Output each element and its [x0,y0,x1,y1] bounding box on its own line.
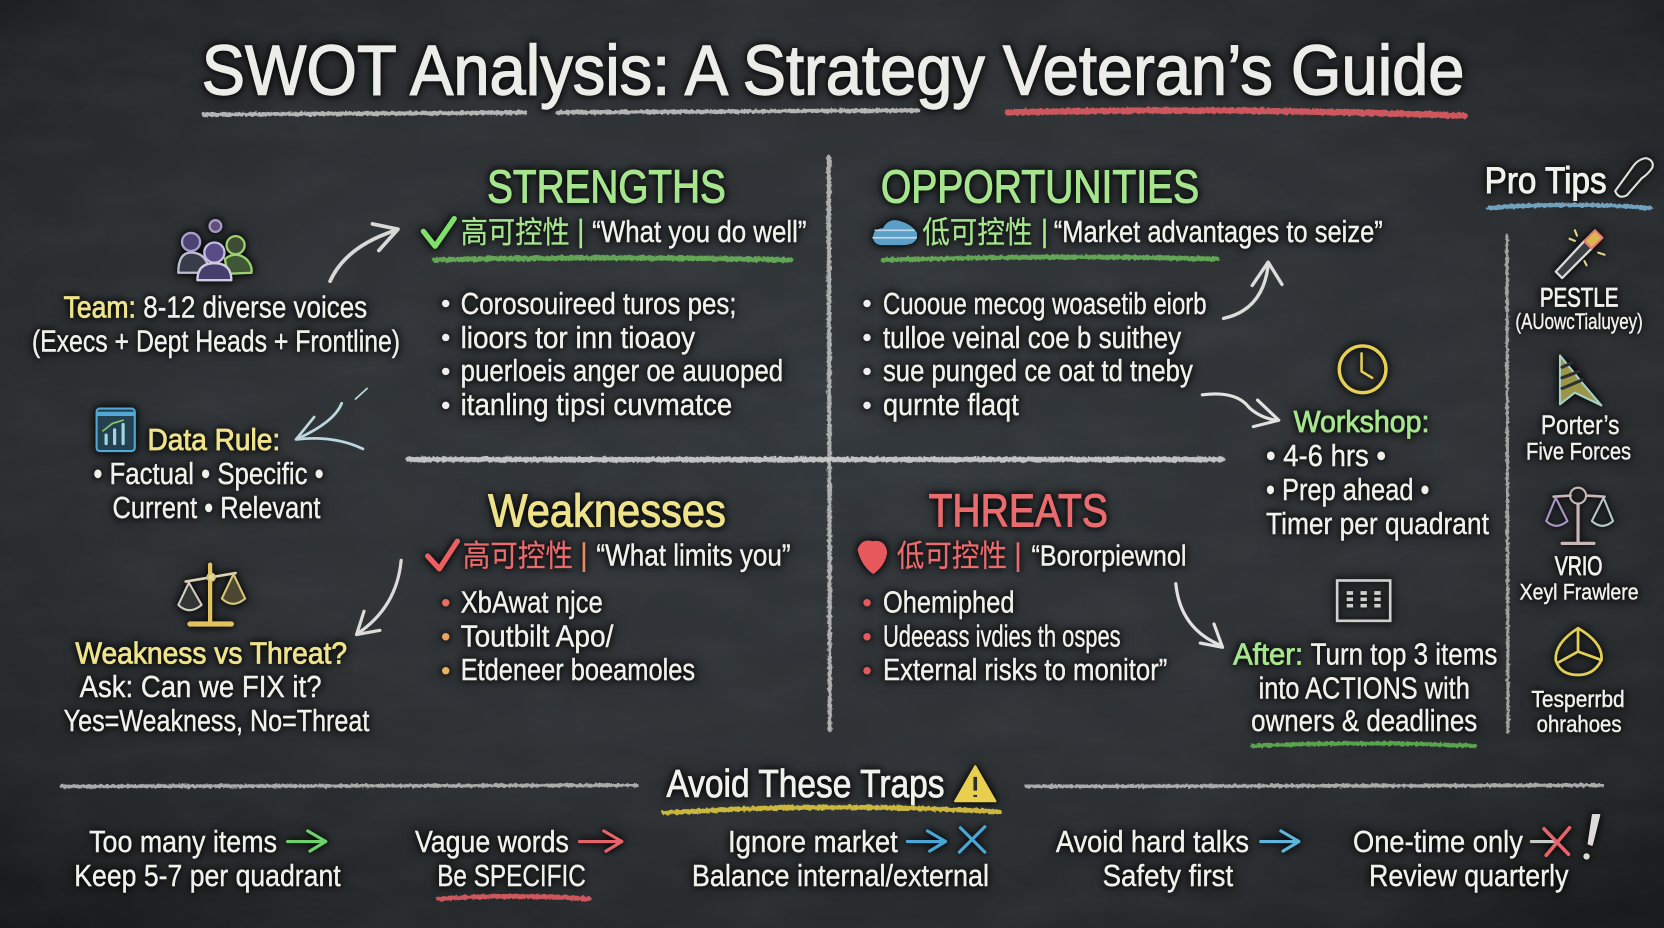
item: pestle [1515,230,1643,334]
bullets: Ohemiphed [883,584,1015,619]
panel: after: Turn top 3 items [1311,636,1497,671]
bullets: lioors tor inn tioaoy [461,320,696,355]
item: vrio: VRIO [1555,551,1602,581]
quote: “Market advantages to seize” [1054,214,1383,249]
item: fourth framework [1531,628,1625,737]
icon: planner grid [1337,580,1390,621]
heading: pro tips: Pro Tips [1485,159,1607,201]
bullets [442,286,783,422]
heading: avoid these traps: Avoid These Traps [666,762,944,806]
control label: 低可控性 [922,215,1033,250]
icon: red blob [857,541,887,574]
item: pestle: PESTLE [1540,283,1618,313]
trap 3: Ignore market [728,824,898,859]
panel: after: into ACTIONS with [1259,670,1470,705]
bullets: puerloeis anger oe auuoped [461,353,783,388]
bullets: Udeeass ivdies th ospes [883,618,1121,653]
bullets: qurnte flaqt [883,387,1019,422]
panel: workshop [1266,346,1489,541]
pro tips underline [1488,205,1650,208]
trap 2: Be SPECIFIC [437,858,586,893]
panel: threats [857,484,1186,687]
panel: team: 8-12 diverse voices [143,289,367,324]
heading: opportunities: OPPORTUNITIES [881,161,1199,213]
quote: “Bororpiewnol [1032,541,1186,573]
after underline [1252,743,1475,746]
panel: data rule [93,409,324,525]
heading: weaknesses: Weaknesses [488,484,726,536]
panel: weakness vs threat [64,565,370,738]
arrow: opportunities up [1224,262,1282,318]
quadrant divider lines [409,157,1223,730]
weakness vs threat text: Ask: Can we FIX it? [80,669,322,704]
trap 1: Too many items [89,824,277,859]
panel: workshop: • Prep ahead • [1266,472,1429,507]
panel: workshop: Timer per quadrant [1266,506,1489,541]
bullets: Toutbilt Apo/ [461,618,614,653]
trap 2 [415,824,622,893]
arrow: to data rule [296,388,367,449]
opportunities underline [883,257,1217,260]
trap 4: Avoid hard talks [1056,824,1249,859]
icon: data chart [97,409,135,451]
item: vrio: Xeyl Frawlere [1520,580,1639,605]
trap 4 [1056,824,1299,893]
trap 2: Vague words [415,824,569,859]
heading: data rule: Data Rule: [148,422,280,457]
bullets [863,584,1167,687]
trap 1: Keep 5-7 per quadrant [74,858,341,893]
control label: 高可控性 [463,539,573,574]
arrow: team to strengths [330,224,398,281]
panel: after: owners & deadlines [1251,703,1477,738]
bullets: Etdeneer boeamoles [461,652,695,687]
heading: threats: THREATS [929,484,1108,536]
trap 5: Review quarterly [1369,858,1569,893]
arrow: to after [1176,584,1223,647]
panel: avoid these traps [74,762,1599,893]
panel: weakness vs threat: Yes=Weakness, No=Threat [64,703,370,738]
trap 5 [1353,815,1599,893]
icon: chalk stick [1615,158,1653,197]
quote: “What you do well” [592,214,807,249]
trap 5: One-time only [1353,824,1523,859]
title underline [204,110,1464,116]
title: SWOT Analysis: A Strategy Veteran’s Guide [202,31,1464,109]
icon: green check [423,219,454,246]
icon: scales [178,565,245,624]
panel: strengths [423,161,807,422]
control label: 低可控性 [897,539,1007,574]
item: porter's five forces: Porter’s [1541,410,1619,440]
separator [583,542,585,572]
icon: cloud [872,220,917,245]
icon: team [178,220,252,280]
quote: “What limits you” [596,538,791,573]
pro tips divider [1507,236,1508,732]
trap 4: Safety first [1103,858,1234,893]
bullets: XbAwat njce [461,584,603,619]
bullets: Corosouireed turos pes; [461,286,736,321]
panel: team [32,220,400,358]
after text: After: [1233,636,1303,671]
traps heading underline [664,807,1000,813]
separator [579,219,582,248]
panel: data rule: Current • Relevant [112,490,321,525]
item: fourth framework: ohrahoes [1537,711,1622,737]
bullets: sue punged ce oat td tneby [883,353,1193,388]
panel: team: (Execs + Dept Heads + Frontline) [32,323,400,358]
panel: opportunities [863,161,1383,422]
separator [1017,542,1019,572]
team text: Team: [64,289,136,324]
bullets: Cuooue mecog woasetib eiorb [883,286,1207,321]
workshop text: • 4-6 hrs • [1266,438,1386,473]
control label: 高可控性 [461,215,570,250]
data rule text: • Factual • Specific • [93,456,324,491]
panel: weaknesses [428,484,791,687]
bullets: itanling tipsi cuvmatce [461,387,732,422]
heading: workshop: Workshop: [1294,404,1429,439]
item: fourth framework: Tesperrbd [1531,686,1625,712]
trap 3: Balance internal/external [692,858,989,893]
panel: pro tips [1485,158,1653,737]
icon: clock [1339,346,1386,393]
trap 3 [692,824,989,893]
arrow: to weakness vs threat [357,560,401,635]
trap 1 [74,824,341,893]
be specific underline [438,896,589,899]
bullets: tulloe veinal coe b suithey [883,320,1182,355]
strengths underline [435,258,791,260]
section divider lines [62,785,1602,786]
arrow: to workshop [1202,394,1279,427]
icon: warning triangle [955,766,995,801]
item: vrio [1520,488,1639,605]
bullets: External risks to monitor” [883,652,1167,687]
heading: strengths: STRENGTHS [487,161,726,213]
icon: red check [428,541,457,569]
item: porter's five forces [1526,356,1631,466]
bullets [442,584,695,687]
separator [1043,219,1046,248]
heading: weakness vs threat: Weakness vs Threat? [75,635,347,670]
bullets [863,286,1207,422]
item: porter's five forces: Five Forces [1526,439,1631,466]
panel: after [1233,580,1497,738]
